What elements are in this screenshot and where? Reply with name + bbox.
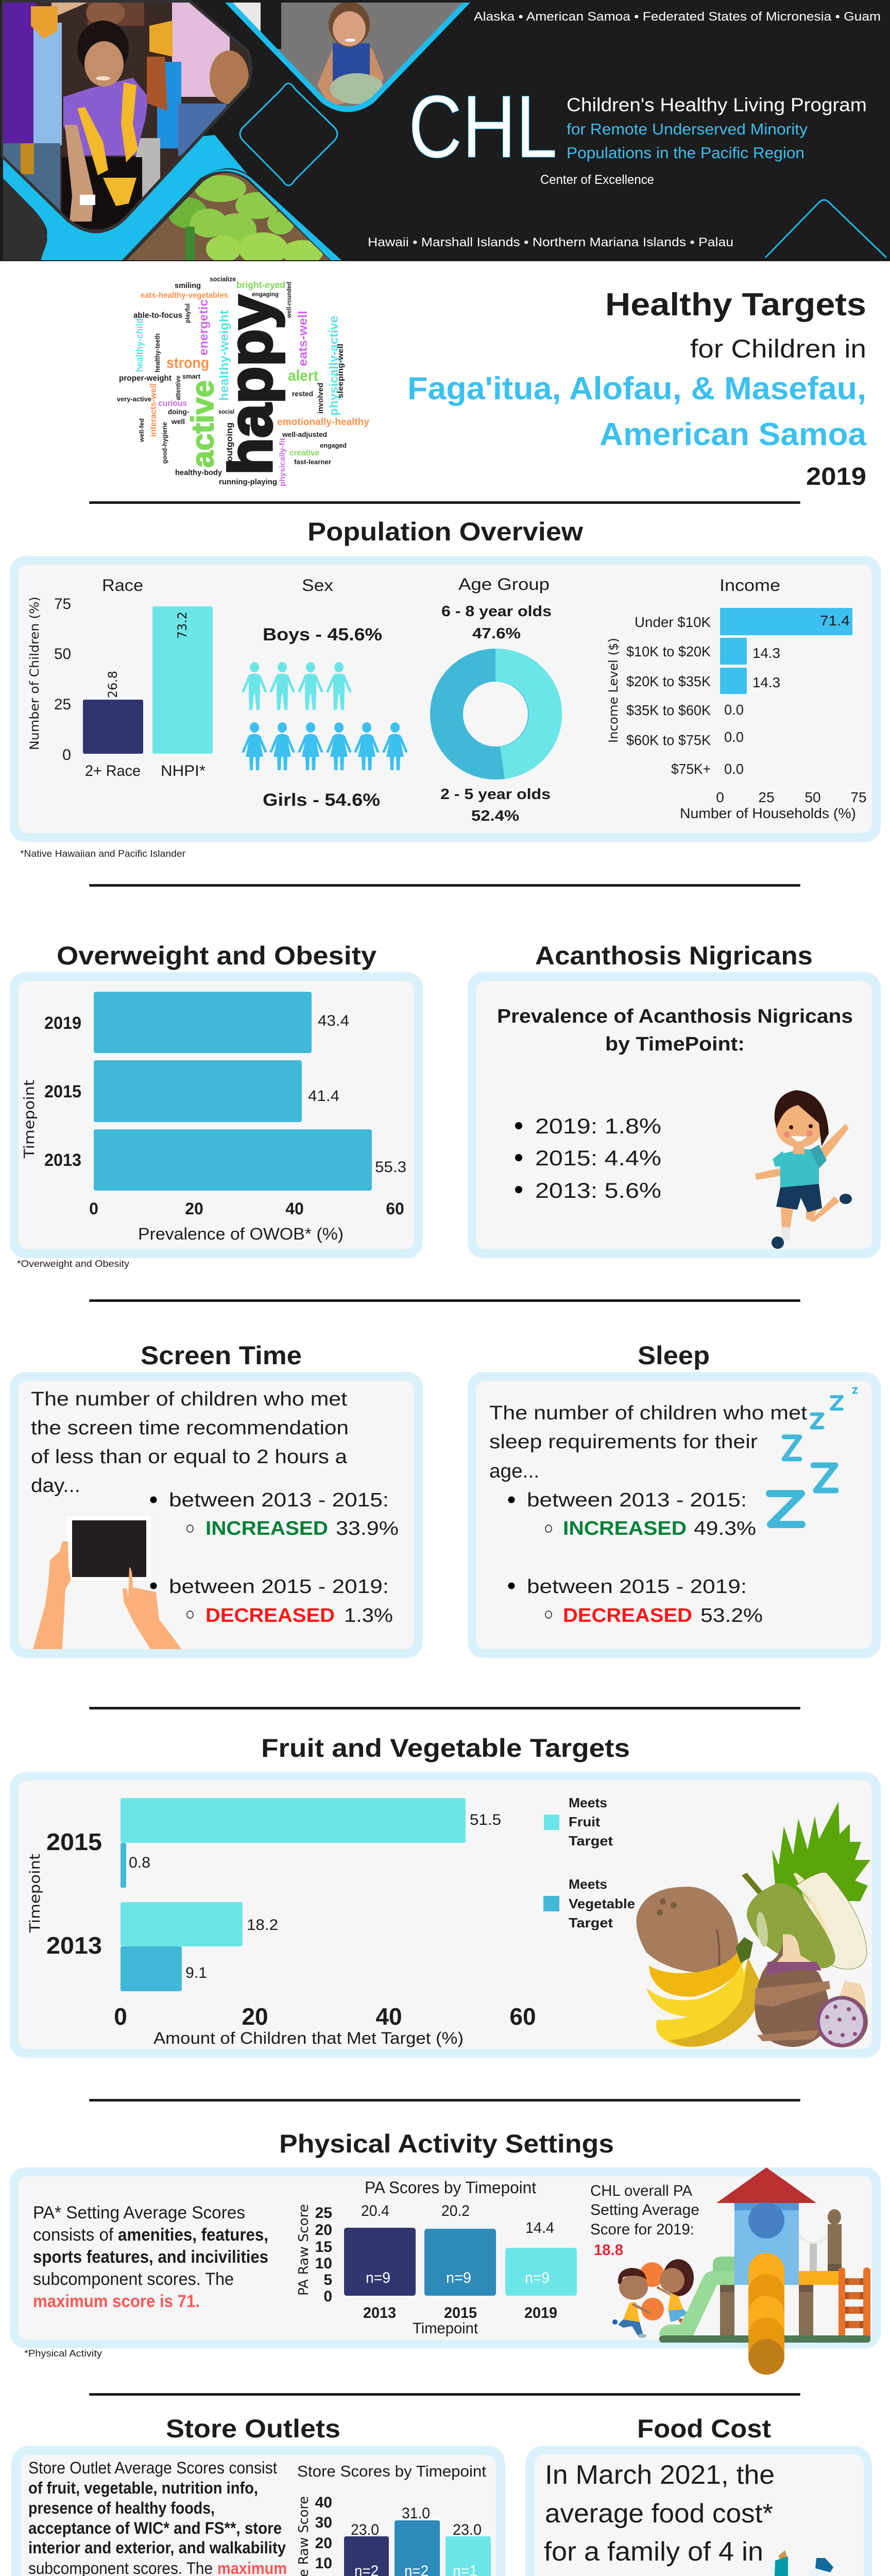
change list: 53.2% [700, 1605, 763, 1626]
legend: Meets [569, 1876, 607, 1892]
panel: acanthosis nigricans: by TimePoint: [605, 1033, 745, 1055]
change list: DECREASED [206, 1605, 335, 1626]
change list: 49.3% [694, 1518, 756, 1539]
legend: Meets [569, 1795, 607, 1810]
center of excellence: Center of Excellence [540, 173, 654, 187]
word cloud: alert [288, 367, 318, 384]
word cloud: healthy-teeth [153, 333, 161, 372]
word cloud: emotionally-healthy [277, 417, 369, 428]
chart: income: 14.3 [752, 674, 780, 690]
bar chart: OWOB: Prevalence of OWOB* (%) [138, 1225, 344, 1243]
bar chart: store scores: 23.0 [453, 2521, 482, 2538]
chart: race: 73.2 [175, 612, 190, 639]
bar chart: PA scores: 5 [323, 2272, 332, 2289]
chart: age group: 2 - 5 year olds [440, 786, 551, 803]
bar chart: PA scores [296, 2178, 577, 2337]
bar chart: OWOB: 41.4 [308, 1088, 339, 1105]
change list: 1.3% [344, 1605, 393, 1626]
footnote: NHPI: *Native Hawaiian and Pacific Islander [20, 849, 185, 859]
bar chart: store scores: 20 [315, 2535, 332, 2552]
icon: fruits and taro [636, 1802, 870, 2047]
program subtitle line 2: Populations in the Pacific Region [567, 144, 805, 162]
bar chart: PA scores: PA Raw Score [296, 2204, 312, 2296]
word cloud: rested [292, 389, 313, 398]
section heading: population overview: Population Overview [307, 517, 583, 546]
intro text: of less than or equal to 2 hours a [31, 1446, 348, 1468]
bar chart: PA scores: 2015 [444, 2304, 477, 2321]
section heading: sleep: Sleep [638, 1341, 710, 1370]
word cloud: physically-active [327, 316, 341, 416]
word cloud [117, 275, 369, 486]
title year: 2019 [806, 463, 866, 490]
bar chart: PA scores: 2013 [363, 2304, 396, 2321]
word cloud: proper-weight [119, 374, 172, 383]
legend [543, 1795, 635, 1930]
chart: income: $60K to $75K [626, 732, 711, 748]
bar chart: 40 [375, 2003, 402, 2030]
bar chart: PA scores: 2019 [524, 2304, 557, 2321]
word cloud: well-adjusted [282, 430, 327, 438]
chart: income: 25 [758, 789, 775, 805]
chart: income: $10K to $20K [626, 643, 711, 659]
food cost text: for a family of 4 in [544, 2537, 763, 2567]
word cloud: engaging [252, 291, 279, 298]
chart: race: 26.8 [106, 671, 120, 698]
title line 1: Healthy Targets [605, 287, 866, 323]
chart: age group [440, 575, 562, 824]
bar chart: Timepoint [26, 1854, 43, 1933]
word cloud: healthy-weight [217, 310, 231, 401]
photo: girl with leis [0, 0, 252, 237]
bullet list: 2013: 5.6% [535, 1178, 661, 1202]
bar chart [26, 1798, 536, 2047]
word cloud: strong [166, 354, 209, 371]
word cloud: eats-well [296, 311, 310, 366]
chart: income: $35K to $60K [626, 702, 711, 718]
bar chart: 2015 [46, 1828, 102, 1855]
word cloud: engaged [320, 442, 347, 449]
chart: age group: 47.6% [472, 625, 521, 642]
word cloud: interacts-well [148, 383, 158, 437]
bar chart: OWOB: 55.3 [375, 1159, 406, 1176]
description text: presence of healthy foods, [28, 2499, 215, 2517]
bar chart: store scores: 10 [315, 2555, 332, 2572]
word cloud: able-to-focus [133, 311, 182, 320]
chart: sex: Boys - 45.6% [263, 625, 382, 645]
change list: DECREASED [563, 1605, 692, 1626]
photo: lettuce rows [121, 165, 341, 265]
header banner [0, 0, 890, 265]
description text: PA* Setting Average Scores [33, 2203, 245, 2223]
description text [28, 2459, 287, 2576]
bar chart: store scores [296, 2462, 491, 2576]
bar chart: store scores: 31.0 [402, 2505, 430, 2522]
panel: screen time [10, 1372, 423, 1658]
panel heading: Prevalence of Acanthosis Nigricans [497, 1006, 853, 1027]
chart: income: 0.0 [724, 702, 744, 718]
bar chart: PA scores: 15 [315, 2239, 332, 2256]
bar chart: OWOB: 2019 [44, 1013, 81, 1033]
panel: physical activity settings [10, 2167, 881, 2348]
description text [33, 2203, 268, 2311]
word cloud: playful [184, 303, 191, 323]
intro text [31, 1388, 349, 1497]
intro text: day... [31, 1475, 80, 1497]
bar chart: store scores: Store Scores by Timepoint [297, 2462, 486, 2480]
change list: between 2015 - 2019: [527, 1576, 747, 1598]
chart: income: $20K to $35K [626, 673, 711, 689]
bar chart: 0.8 [129, 1854, 150, 1871]
bar chart: PA scores: Timepoint [413, 2320, 478, 2337]
program name: Children's Healthy Living Program [567, 94, 867, 115]
word cloud: well [171, 417, 185, 426]
word cloud: creative [289, 449, 319, 457]
bar chart: Amount of Children that Met Target (%) [153, 2029, 464, 2047]
chart: race [27, 576, 213, 779]
description text: of fruit, vegetable, nutrition info, [28, 2479, 258, 2497]
bar chart: store scores: 40 [315, 2494, 332, 2511]
bar chart: 51.5 [470, 1811, 501, 1828]
chart: income [606, 576, 867, 821]
overall score callout: Setting Average [590, 2201, 699, 2218]
title block [407, 287, 867, 490]
icon: boys [242, 662, 352, 710]
dark corner [3, 178, 47, 260]
chart: income: Income Level ($) [606, 638, 621, 743]
bar chart: PA scores: n=9 [525, 2269, 550, 2286]
word cloud: well-fed [138, 418, 145, 443]
bar chart: PA scores: 20.2 [441, 2202, 470, 2219]
panel: fruit and vegetable targets [10, 1772, 881, 2058]
legend: Vegetable [569, 1896, 635, 1911]
word cloud: physically-fit [278, 438, 287, 486]
chart: income: 50 [805, 789, 821, 805]
food cost text [544, 2460, 775, 2576]
bar chart: OWOB: 20 [185, 1199, 203, 1218]
chart: race: 2+ Race [85, 762, 141, 779]
panel: store outlets [11, 2446, 505, 2576]
bar chart: OWOB: 0 [89, 1199, 98, 1218]
word cloud: smiling [175, 281, 201, 290]
panel: acanthosis nigricans [468, 972, 881, 1258]
panel: population overview [10, 556, 881, 842]
chart: income: $75K+ [671, 761, 711, 777]
change list: INCREASED [206, 1518, 328, 1539]
icon: hands holding tablet [33, 1515, 182, 1649]
panel: food cost [525, 2446, 883, 2576]
chart: sex: Sex [302, 576, 333, 595]
intro text [489, 1402, 807, 1482]
chart: race: 0 [62, 747, 71, 764]
bar chart: PA scores: PA Scores by Timepoint [365, 2178, 536, 2197]
icon: girls [242, 722, 408, 770]
word cloud: outgoing [225, 422, 234, 462]
footnote: PA: *Physical Activity [24, 2348, 102, 2359]
icon: playground slide [659, 2167, 870, 2375]
section heading: food cost: Food Cost [637, 2414, 771, 2443]
overall score callout [590, 2182, 699, 2259]
food cost text: In March 2021, the [545, 2460, 775, 2490]
island list bottom: Hawaii • Marshall Islands • Northern Mariana Islands • Palau [368, 235, 733, 249]
chart: income: 0.0 [724, 761, 744, 777]
chart: income: Number of Households (%) [680, 805, 856, 821]
bar chart: PA scores: 14.4 [525, 2219, 554, 2236]
bar chart: 0 [114, 2003, 127, 2030]
word cloud: attentive [174, 376, 182, 400]
bar chart: OWOB: 2013 [44, 1150, 81, 1170]
title line 2: for Children in [690, 334, 866, 363]
overall score callout: Score for 2019: [590, 2221, 694, 2238]
description text: Store Outlet Average Scores consist [28, 2459, 277, 2477]
bar chart: 18.2 [247, 1917, 278, 1934]
word cloud: energetic [197, 299, 211, 355]
bullet list: 2019: 1.8% [535, 1114, 661, 1138]
bar chart: PA scores: 10 [315, 2255, 332, 2272]
description text: maximum score is 71. [33, 2292, 200, 2311]
word cloud: good-hygiene [161, 422, 168, 464]
word cloud: running-playing [219, 478, 277, 486]
word cloud: bright-eyed [236, 280, 285, 290]
diamond outline [240, 83, 337, 185]
chart: race: Race [102, 576, 143, 595]
icon: boy running [755, 1090, 852, 1249]
bar chart: OWOB: 60 [386, 1199, 404, 1218]
word cloud: well-rounded [285, 282, 293, 318]
title location: Faga'itua, Alofau, & Masefau, [407, 371, 866, 406]
chart: income: 71.4 [820, 613, 850, 629]
footnote: OWOB: *Overweight and Obesity [17, 1259, 129, 1269]
bar chart: OWOB: 2015 [44, 1082, 81, 1101]
bar chart: PA scores: n=9 [446, 2269, 471, 2286]
description text: subcomponent scores. The [33, 2269, 234, 2289]
intro text: The number of children who met [489, 1402, 807, 1424]
chart: race: Number of Children (%) [27, 597, 42, 750]
panel: sleep [468, 1372, 881, 1658]
bar chart: PA scores: n=9 [366, 2269, 390, 2286]
triangle outline [765, 200, 886, 258]
word cloud: involved [316, 383, 325, 414]
word cloud: very-active [117, 395, 151, 403]
bar chart: PA scores: 20 [315, 2222, 332, 2239]
word cloud: socialize [210, 275, 236, 283]
icon: kids with basketballs [612, 2259, 694, 2338]
chart: race: NHPI* [161, 762, 206, 779]
donut [447, 649, 562, 779]
chart: income: Under $10K [635, 614, 711, 630]
chart: age group: 52.4% [471, 808, 519, 824]
panel: overweight and obesity [10, 972, 423, 1258]
word cloud: sleeping-well [336, 344, 345, 398]
program subtitle: for Remote Underserved Minority [567, 120, 808, 138]
word cloud: active [185, 380, 220, 468]
section heading: store outlets: Store Outlets [166, 2414, 340, 2443]
icon: grocery bag [742, 2550, 883, 2576]
chart: age group: Age Group [458, 575, 550, 594]
bar chart: 9.1 [185, 1964, 207, 1981]
word cloud: fast-learner [294, 458, 331, 466]
intro text: the screen time recommendation [31, 1417, 349, 1439]
section heading: acanthosis nigricans: Acanthosis Nigricans [535, 941, 813, 970]
description text: consists of [33, 2225, 114, 2245]
food cost text: average food cost* [545, 2499, 773, 2529]
chart: age group: 6 - 8 year olds [441, 603, 552, 620]
word cloud: social [218, 408, 234, 415]
bullet list: 2015: 4.4% [535, 1146, 661, 1170]
bar chart: PA scores: 25 [315, 2205, 332, 2222]
description text: acceptance of WIC* and FS**, store [28, 2519, 282, 2537]
bar chart: PA scores: 0 [323, 2288, 332, 2305]
chart: income: 14.3 [752, 645, 780, 661]
word cloud: happy [217, 295, 285, 475]
intro text: sleep requirements for their [489, 1431, 758, 1453]
word cloud: eats-healthy-vegetables [141, 291, 228, 300]
legend: Fruit [569, 1814, 600, 1829]
legend: Target [569, 1915, 613, 1930]
legend: Target [569, 1833, 613, 1849]
word cloud: curious [158, 398, 187, 408]
overall score callout: CHL overall PA [590, 2182, 692, 2199]
bar chart: 60 [509, 2003, 536, 2030]
island list top: Alaska • American Samoa • Federated States of Micronesia • Guam [474, 10, 881, 24]
bar chart: OWOB: Timepoint [21, 1080, 38, 1159]
photo: toddler with bag of greens [225, 0, 470, 118]
chart: income: 75 [850, 789, 867, 805]
chart: income: 0 [716, 789, 724, 805]
title location line 2: American Samoa [600, 417, 867, 452]
change list [150, 1489, 399, 1626]
icon: sleeping Z marks [769, 1388, 857, 1524]
chart: income: 0.0 [724, 729, 744, 745]
description text: interior and exterior, and walkability [28, 2538, 286, 2557]
chart: sex: Girls - 54.6% [263, 790, 380, 810]
bar chart: OWOB: 43.4 [318, 1012, 349, 1029]
chart: race: 50 [54, 646, 71, 663]
bar chart: store scores: 30 [315, 2514, 332, 2531]
intro text: age... [489, 1461, 539, 1482]
section heading: overweight and obesity: Overweight and Obesity [57, 941, 376, 970]
section heading: fruit and vegetable targets: Fruit and Vegetable Targets [261, 1734, 630, 1762]
description text: sports features, and incivilities [33, 2247, 268, 2267]
change list: between 2015 - 2019: [169, 1576, 389, 1598]
chart: sex [242, 576, 408, 810]
word cloud: healthy-body [175, 468, 222, 477]
bar chart: OWOB: 40 [285, 1199, 304, 1218]
word cloud: smart [182, 372, 201, 380]
change list: INCREASED [563, 1518, 687, 1539]
change list [508, 1489, 763, 1626]
chart: income: Income [720, 576, 780, 595]
description text: amenities, features, [118, 2225, 268, 2245]
bar chart: 20 [242, 2003, 268, 2030]
change list: 33.9% [336, 1518, 399, 1539]
section heading: screen time: Screen Time [141, 1341, 302, 1370]
bar chart: store scores: 23.0 [351, 2521, 379, 2538]
chart: race: 25 [54, 696, 71, 713]
bar chart: 2013 [46, 1932, 102, 1959]
bar chart: OWOB [21, 992, 406, 1243]
word cloud: healthy-child [134, 318, 145, 372]
overall score callout: 18.8 [594, 2242, 623, 2259]
CHL logo text: CHL [408, 77, 557, 176]
section heading: physical activity settings: Physical Activity Settings [279, 2129, 614, 2158]
change list: between 2013 - 2015: [527, 1489, 747, 1511]
bar chart: PA scores: 20.4 [361, 2202, 389, 2219]
change list: between 2013 - 2015: [169, 1489, 389, 1511]
bullet list [515, 1114, 661, 1202]
blue shape behind photos [3, 135, 248, 260]
chart: race: 75 [54, 596, 71, 613]
intro text: The number of children who met [31, 1388, 347, 1410]
word cloud: doing- [168, 408, 189, 416]
